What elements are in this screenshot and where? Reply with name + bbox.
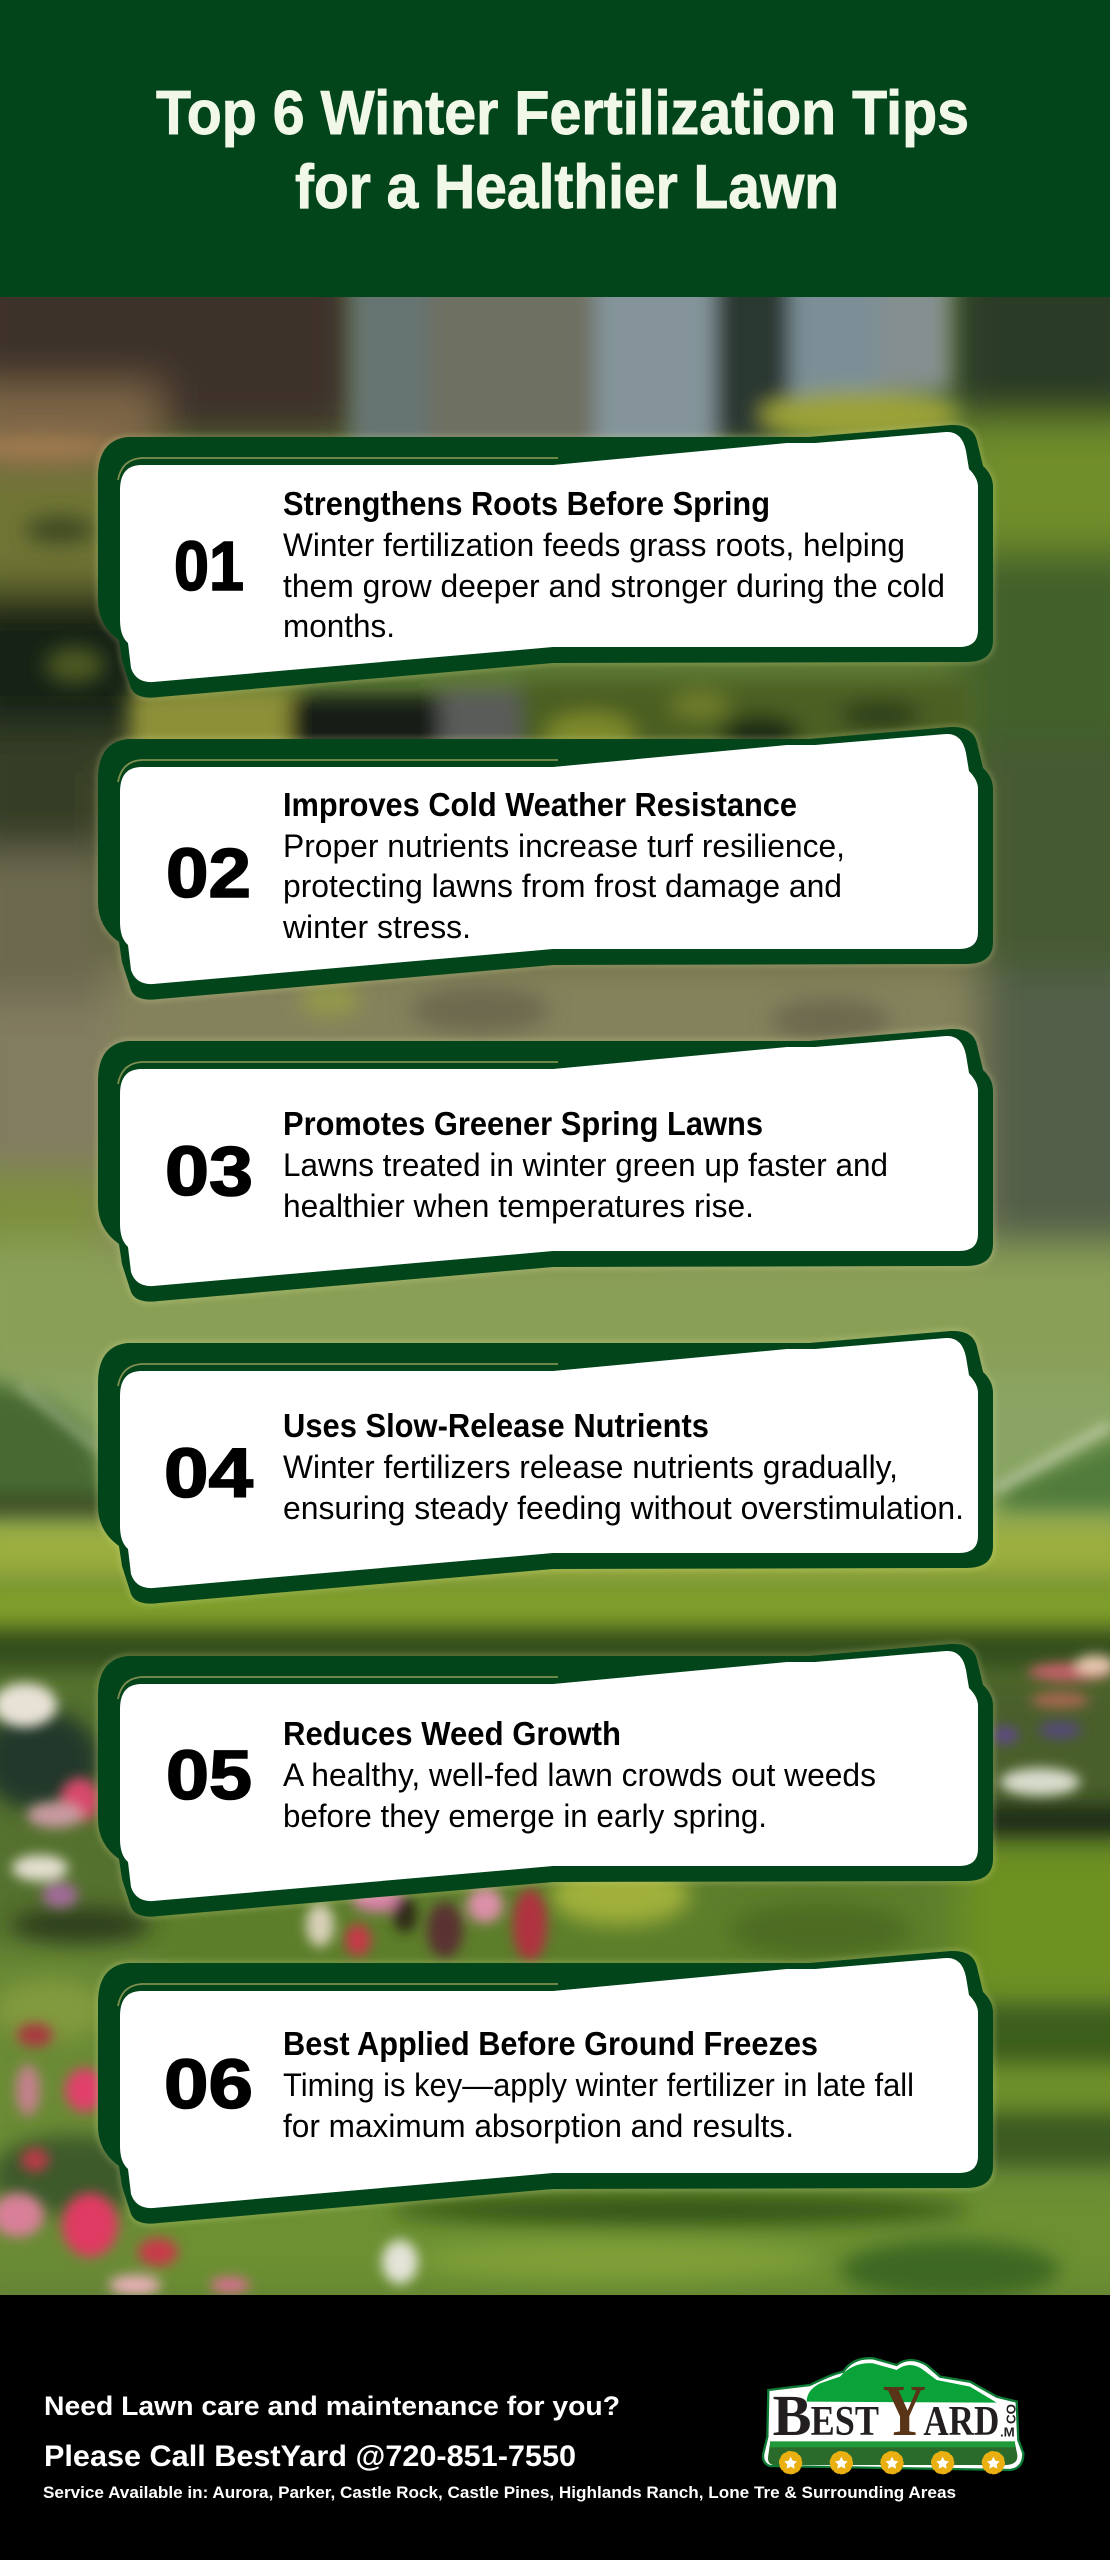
logo: BestYard.com: .M	[1000, 2425, 1015, 2440]
title	[156, 79, 969, 222]
title: Top 6 Winter Fertilization Tips	[156, 79, 969, 148]
tip text: healthier when temperatures rise.	[283, 1188, 754, 1224]
tip text	[283, 1449, 964, 1526]
card shape	[98, 727, 993, 1000]
tip heading: Uses Slow-Release Nutrients	[283, 1408, 709, 1445]
tip text	[282, 828, 845, 945]
number: 01	[174, 527, 244, 605]
tip text: Lawns treated in winter green up faster and	[283, 1147, 888, 1183]
card 02	[98, 727, 993, 1000]
number: 03	[165, 1132, 253, 1210]
tip text: Timing is key—apply winter fertilizer in late fall	[283, 2067, 914, 2103]
tip text	[283, 527, 945, 644]
card shape	[98, 1029, 993, 1302]
card shape	[98, 1951, 993, 2224]
footer call to action	[43, 2391, 956, 2502]
card shape	[98, 1331, 993, 1604]
tip text: them grow deeper and stronger during the cold	[283, 568, 945, 604]
tip text: for maximum absorption and results.	[283, 2108, 794, 2144]
card 04	[98, 1331, 993, 1604]
tip text: before they emerge in early spring.	[283, 1798, 767, 1834]
footer call to action: Service Available in: Aurora, Parker, Castle Rock, Castle Pines, Highlands Ranch, Lone Tre & Surrounding Areas	[43, 2483, 956, 2502]
footer call to action: Need Lawn care and maintenance for you?	[44, 2391, 620, 2421]
tip text: Winter fertilization feeds grass roots, helping	[283, 527, 905, 563]
card 06	[98, 1951, 993, 2224]
number: 02	[166, 834, 251, 912]
tip text: Winter fertilizers release nutrients gradually,	[283, 1449, 898, 1485]
card shape	[98, 425, 993, 698]
tip text: Proper nutrients increase turf resilience,	[283, 828, 845, 864]
footer band	[0, 2295, 1110, 2560]
card 01	[98, 425, 993, 698]
number: 04	[164, 1434, 253, 1512]
logo: BestYard.com	[763, 2358, 1023, 2472]
right column bands	[960, 420, 1110, 550]
lower right	[981, 1672, 1110, 1810]
lawn with sprinkler haze	[0, 1375, 1110, 1515]
tip text	[283, 1757, 876, 1834]
behind cards 2 and 3	[110, 770, 980, 960]
logo: BestYard.com: CO	[1003, 2404, 1018, 2424]
tip heading: Reduces Weed Growth	[283, 1716, 621, 1753]
card 05	[98, 1644, 993, 1917]
tip heading: Improves Cold Weather Resistance	[283, 787, 797, 824]
lower left shrubs	[0, 1694, 121, 1912]
tip text: winter stress.	[282, 909, 471, 945]
header band	[0, 0, 1110, 297]
tip text: months.	[283, 608, 395, 644]
sprinkler spray	[20, 1385, 1110, 1490]
card 03	[98, 1029, 993, 1302]
tip heading: Strengthens Roots Before Spring	[283, 486, 770, 523]
tip text: protecting lawns from frost damage and	[283, 868, 842, 904]
logo: BestYard.com: ARD	[923, 2399, 999, 2445]
title: for a Healthier Lawn	[295, 153, 839, 222]
tip text	[283, 1147, 888, 1224]
logo: BestYard.com: EST	[811, 2399, 879, 2445]
left column bands	[0, 385, 160, 465]
number: 05	[166, 1736, 252, 1814]
tip heading: Best Applied Before Ground Freezes	[283, 2026, 818, 2063]
tip heading: Promotes Greener Spring Lawns	[283, 1106, 763, 1143]
number: 06	[164, 2045, 253, 2123]
tip text	[283, 2067, 914, 2144]
logo: BestYard.com: Y	[883, 2370, 926, 2451]
tip text: A healthy, well-fed lawn crowds out weeds	[283, 1757, 876, 1793]
gap between cards 1 and 2	[130, 690, 300, 760]
footer call to action: Please Call BestYard @720-851-7550	[44, 2440, 576, 2473]
tip text: ensuring steady feeding without overstimulation.	[283, 1490, 964, 1526]
logo: BestYard.com: B	[773, 2383, 812, 2448]
card shape	[98, 1644, 993, 1917]
